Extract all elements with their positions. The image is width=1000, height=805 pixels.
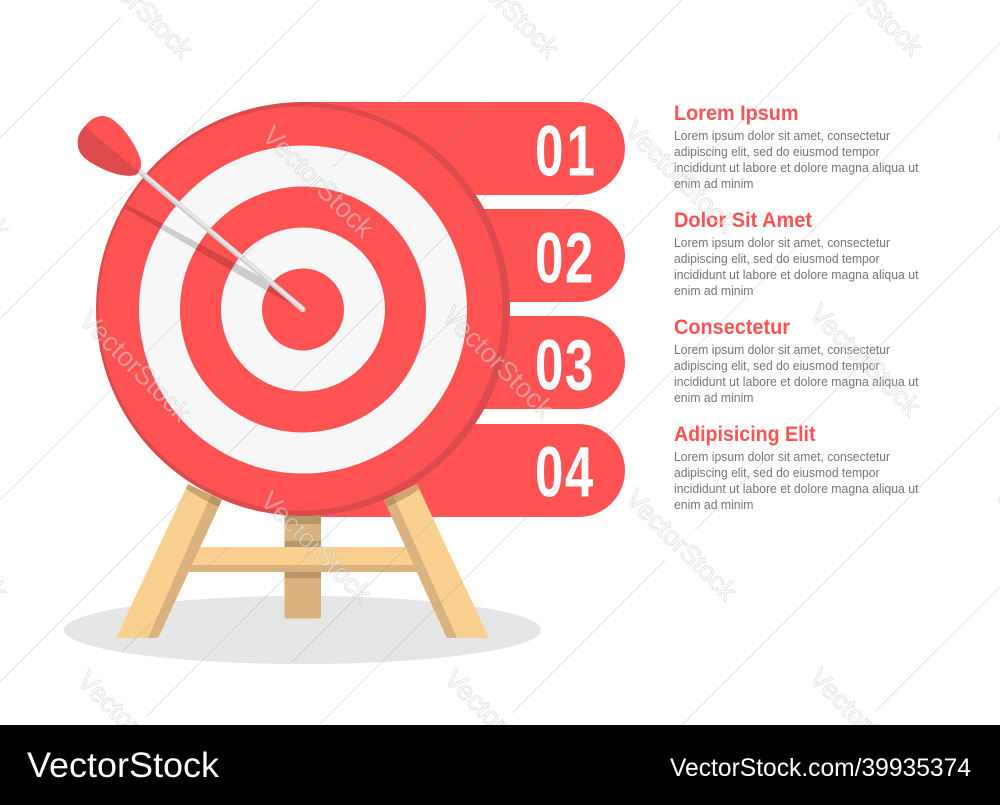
text block 2: enim ad minim: [674, 283, 754, 298]
white ring inner: [221, 228, 385, 392]
footer image id: VectorStock.com/39935374: [670, 754, 971, 782]
text block 2: adipiscing elit, sed do eiusmod tempor: [674, 251, 880, 266]
tab 01: 01: [535, 112, 595, 192]
text block 2: Lorem ipsum dolor sit amet, consectetur: [674, 235, 891, 250]
ground shadow: [64, 596, 541, 664]
text block 4: incididunt ut labore et dolore magna aliqua ut: [674, 481, 919, 496]
watermark overlay: VectorStock: [803, 298, 927, 422]
text block 2: incididunt ut labore et dolore magna aliqua ut: [674, 267, 919, 282]
text block 1: [674, 102, 919, 191]
arrow shadow: [125, 204, 294, 306]
target: [96, 102, 510, 516]
left leg: [116, 484, 222, 638]
text block 1: Lorem Ipsum: [674, 102, 798, 125]
tab 04: [300, 424, 625, 517]
right leg: [384, 484, 489, 638]
target face: [98, 106, 502, 510]
text block 2: Dolor Sit Amet: [674, 209, 812, 232]
arrow: [70, 116, 303, 310]
tab 02: 02: [535, 219, 593, 299]
text block 4: [674, 423, 919, 512]
tab 03: 03: [535, 326, 593, 406]
crossbar: [186, 547, 420, 572]
text block 4: Adipisicing Elit: [674, 423, 816, 446]
tab 04: 04: [535, 433, 594, 513]
watermark overlay: VectorStock: [436, 300, 560, 424]
text block 1: incididunt ut labore et dolore magna aliqua ut: [674, 160, 919, 175]
tab 01: [300, 102, 625, 195]
watermark overlay: VectorStock: [438, 663, 562, 787]
tab 02: [300, 209, 625, 302]
footer bar: [0, 725, 1000, 805]
text block 4: Lorem ipsum dolor sit amet, consectetur: [674, 449, 891, 464]
text block 3: [674, 316, 919, 405]
watermark overlay: VectorStock: [619, 483, 743, 607]
text block 4: adipiscing elit, sed do eiusmod tempor: [674, 465, 880, 480]
text block 1: enim ad minim: [674, 176, 754, 191]
watermark overlay: VectorStock: [256, 120, 380, 244]
text block 3: adipiscing elit, sed do eiusmod tempor: [674, 358, 880, 373]
target rim: [96, 102, 510, 516]
arrow shaft: [139, 170, 303, 310]
text block 1: Lorem ipsum dolor sit amet, consectetur: [674, 128, 891, 143]
watermark overlay: VectorStock: [71, 665, 195, 789]
watermark overlay: VectorStock: [618, 115, 742, 239]
text block 2: [674, 209, 919, 298]
number tabs: [300, 102, 625, 517]
bullseye: [262, 268, 344, 350]
text block 3: Lorem ipsum dolor sit amet, consectetur: [674, 342, 891, 357]
tab 03: [300, 316, 625, 409]
watermark overlay: VectorStock: [254, 485, 378, 609]
watermark overlay: VectorStock: [73, 304, 197, 428]
white ring outer: [139, 146, 467, 474]
wooden stand: [116, 484, 489, 638]
text block 3: incididunt ut labore et dolore magna aliqua ut: [674, 374, 919, 389]
centre post: [284, 510, 321, 618]
arrow fletching: [78, 116, 141, 176]
text block 3: Consectetur: [674, 316, 790, 339]
text block 3: enim ad minim: [674, 390, 754, 405]
red ring: [180, 186, 426, 432]
footer logo: VectorStock: [27, 746, 220, 785]
watermark overlay: VectorStock: [803, 662, 927, 786]
text block 4: enim ad minim: [674, 497, 754, 512]
text block 1: adipiscing elit, sed do eiusmod tempor: [674, 144, 880, 159]
